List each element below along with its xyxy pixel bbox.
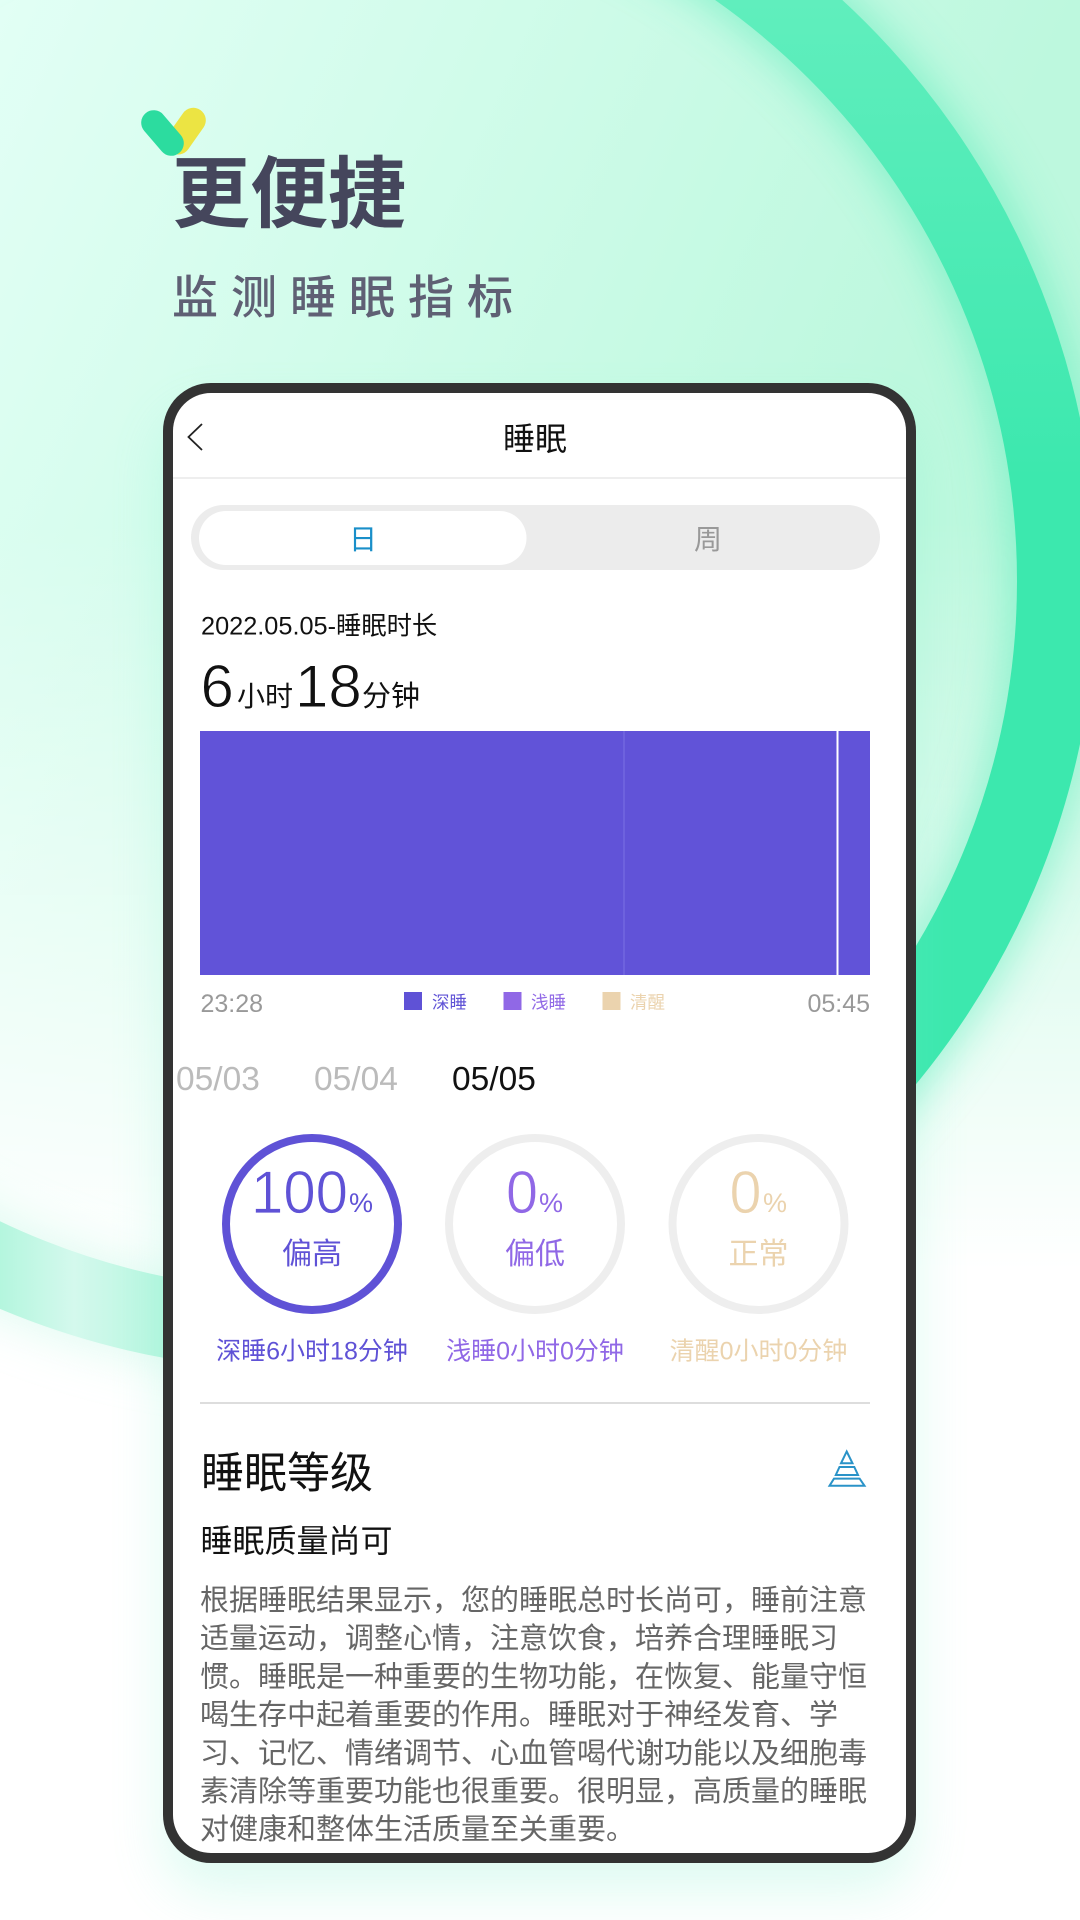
icon: pyramid	[830, 1452, 864, 1486]
description text: 根据睡眠结果显示，您的睡眠总时长尚可，睡前注意	[200, 1584, 867, 1617]
date selector: 05/05	[452, 1061, 536, 1098]
icon: check logo	[154, 120, 193, 143]
stat: light sleep: %	[539, 1188, 563, 1218]
stat: awake	[670, 1138, 847, 1366]
sleep duration	[200, 653, 420, 720]
stat: deep sleep: %	[349, 1188, 373, 1218]
chart axis end time: 05:45	[807, 990, 870, 1018]
stat: awake: 0	[730, 1159, 762, 1226]
title: 更便捷	[172, 150, 406, 238]
description text: 惯。睡眠是一种重要的生物功能，在恢复、能量守恒	[200, 1660, 867, 1693]
stat: light sleep: 浅睡0小时0分钟	[446, 1338, 624, 1366]
section heading: 睡眠等级	[201, 1450, 373, 1498]
day week toggle: 周	[694, 524, 722, 555]
subtitle: 监测睡眠指标	[172, 272, 526, 324]
description text: 素清除等重要功能也很重要。很明显，高质量的睡眠	[200, 1775, 867, 1808]
decorative ring arc	[0, 0, 1057, 1331]
stat: deep sleep: 深睡6小时18分钟	[216, 1338, 408, 1366]
description text: 适量运动，调整心情，注意饮食，培养合理睡眠习	[200, 1622, 838, 1655]
sleep duration: 6	[200, 653, 234, 720]
chart axis start time: 23:28	[200, 990, 263, 1018]
page title: 睡眠	[503, 421, 567, 457]
icon: back chevron	[188, 424, 202, 450]
phone mockup	[163, 383, 916, 1893]
stat: light sleep: 0	[506, 1159, 538, 1226]
description text	[200, 1584, 867, 1846]
quality subheading: 睡眠质量尚可	[200, 1523, 393, 1559]
stat: awake: %	[763, 1188, 787, 1218]
chart legend	[404, 992, 665, 1012]
chart legend: 深睡	[432, 992, 467, 1012]
sleep duration: 分钟	[362, 680, 420, 713]
day week toggle	[191, 505, 880, 570]
chart legend: 清醒	[630, 992, 665, 1012]
description text: 对健康和整体生活质量至关重要。	[200, 1813, 635, 1846]
date selector: 05/03	[176, 1061, 260, 1098]
day week toggle: 日	[349, 524, 377, 555]
sleep duration: 18	[295, 653, 362, 720]
stat: light sleep	[446, 1138, 624, 1366]
stat: awake: 清醒0小时0分钟	[670, 1338, 847, 1366]
stat: deep sleep: 100	[251, 1159, 348, 1226]
stat: deep sleep: 偏高	[282, 1238, 342, 1271]
description text: 习、记忆、情绪调节、心血管喝代谢功能以及细胞毒	[200, 1737, 867, 1770]
date selector: 05/04	[314, 1061, 398, 1098]
chart legend: 浅睡	[531, 992, 566, 1012]
stat: deep sleep	[216, 1138, 408, 1366]
date selector	[176, 1061, 536, 1098]
stat: awake: 正常	[728, 1238, 788, 1271]
sleep duration: 小时	[237, 681, 293, 712]
sleep bar chart	[200, 731, 870, 975]
stat: light sleep: 偏低	[505, 1238, 565, 1271]
nav bar	[173, 421, 906, 479]
description text: 喝生存中起着重要的作用。睡眠对于神经发育、学	[200, 1699, 838, 1732]
date heading: 2022.05.05-睡眠时长	[201, 612, 437, 640]
